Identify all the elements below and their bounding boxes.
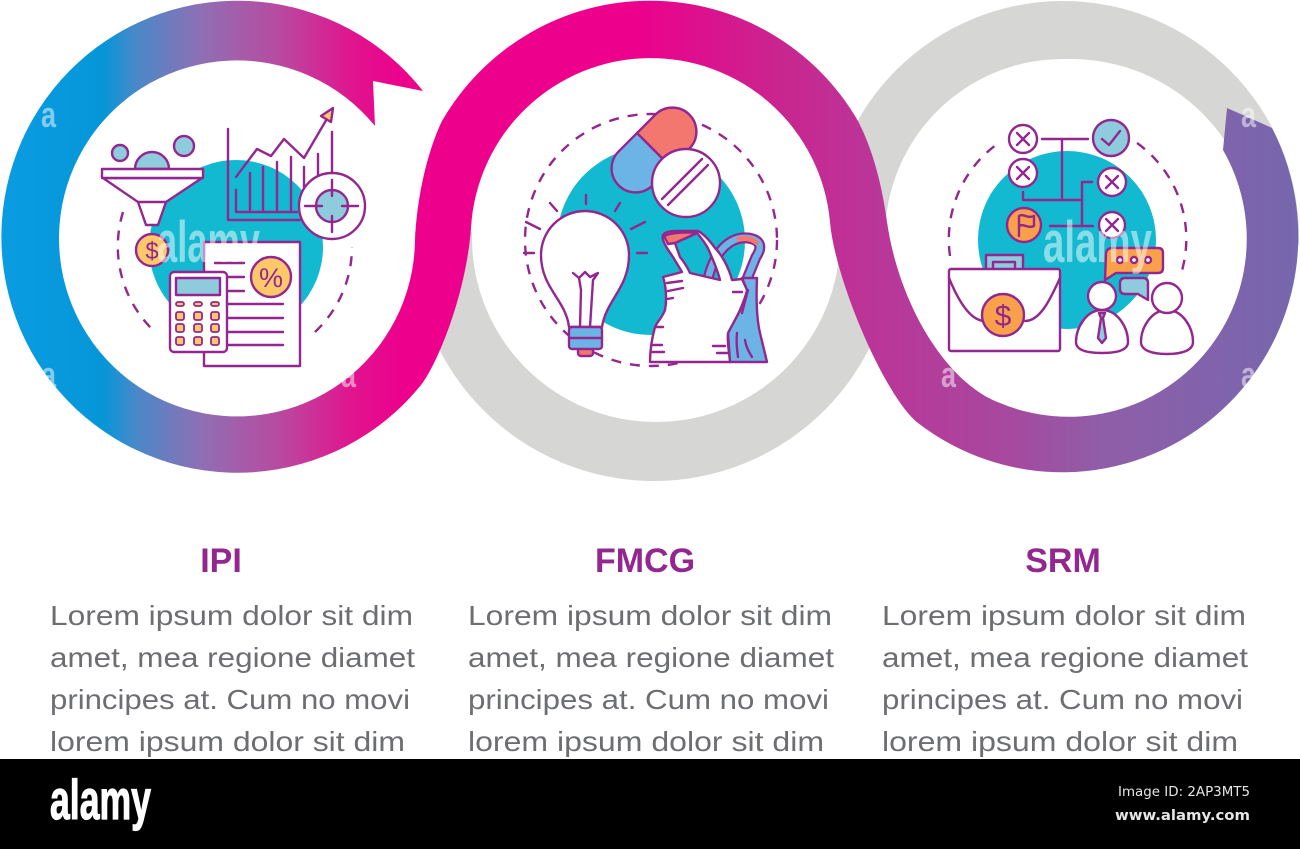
text block: IPI: amet, mea regione diamet bbox=[50, 642, 415, 673]
text block: FMCG: lorem ipsum dolor sit dim bbox=[468, 726, 824, 757]
teal circle bbox=[557, 147, 745, 335]
text block: IPI: principes at. Cum no movi bbox=[50, 684, 410, 715]
text block: SRM: principes at. Cum no movi bbox=[882, 684, 1243, 715]
text block: FMCG: Lorem ipsum dolor sit dim bbox=[468, 600, 832, 631]
text block: IPI: Lorem ipsum dolor sit dim bbox=[50, 600, 413, 631]
percent badge bbox=[251, 257, 291, 297]
teal circle bbox=[149, 160, 323, 334]
grey background rings bbox=[413, 0, 1299, 481]
alamy logo: alamy bbox=[50, 768, 151, 831]
shopping bag bbox=[650, 231, 767, 362]
text block: IPI: lorem ipsum dolor sit dim bbox=[50, 726, 405, 757]
watermark: alamy bbox=[1043, 210, 1152, 275]
blue side panel bbox=[728, 278, 767, 362]
briefcase bbox=[949, 255, 1060, 351]
businessman bbox=[1076, 282, 1128, 353]
dashed arc bbox=[118, 212, 352, 332]
heading: IPI: IPI bbox=[200, 542, 242, 580]
text block: SRM: amet, mea regione diamet bbox=[882, 642, 1248, 673]
text block: FMCG: principes at. Cum no movi bbox=[468, 684, 829, 715]
calculator bbox=[170, 272, 227, 352]
watermark: a bbox=[41, 354, 57, 395]
colleague bbox=[1141, 283, 1193, 354]
bag creases bbox=[652, 281, 752, 357]
coral strap lining bbox=[664, 232, 697, 244]
target bbox=[299, 173, 365, 239]
website: www.alamy.com bbox=[1115, 808, 1250, 824]
teal circle bbox=[978, 151, 1156, 329]
decision tree bbox=[1007, 120, 1129, 242]
dashed circle bbox=[525, 114, 777, 366]
watermark: a bbox=[941, 354, 957, 395]
inner white discs bbox=[59, 54, 1257, 431]
growth chart bbox=[228, 108, 333, 220]
back handle bbox=[708, 238, 760, 279]
capsule pill bbox=[602, 98, 706, 202]
text block: SRM bbox=[882, 600, 1248, 757]
funnel bbox=[102, 136, 203, 225]
icon: IPI bbox=[102, 108, 365, 366]
percent badge: % bbox=[259, 263, 283, 293]
coin bbox=[136, 234, 168, 266]
footer bar bbox=[0, 759, 1300, 849]
heading: FMCG: FMCG bbox=[595, 542, 695, 580]
briefcase: $ bbox=[995, 300, 1012, 333]
heading: SRM: SRM bbox=[1025, 542, 1101, 580]
gradient ribbon arrow bbox=[1, 1, 1298, 473]
icon: FMCG bbox=[524, 98, 777, 366]
watermark: a bbox=[1241, 94, 1257, 135]
text block: SRM: lorem ipsum dolor sit dim bbox=[882, 726, 1238, 757]
text block: FMCG bbox=[468, 600, 834, 757]
dashed arc bbox=[949, 142, 1186, 277]
document bbox=[204, 242, 300, 366]
text block: FMCG: amet, mea regione diamet bbox=[468, 642, 834, 673]
watermark: alamy bbox=[157, 210, 260, 275]
image id: Image ID: 2AP3MT5 bbox=[1118, 785, 1250, 800]
icon: SRM bbox=[949, 120, 1193, 354]
watermark bbox=[41, 94, 1257, 395]
text block: IPI bbox=[50, 600, 415, 757]
speech bubbles bbox=[1105, 248, 1163, 300]
light bulb bbox=[524, 195, 647, 356]
round tablet bbox=[652, 149, 720, 217]
watermark: a bbox=[341, 354, 357, 395]
white bag body bbox=[650, 231, 747, 362]
text block: SRM: Lorem ipsum dolor sit dim bbox=[882, 600, 1246, 631]
watermark: a bbox=[1241, 354, 1257, 395]
watermark: a bbox=[41, 94, 57, 135]
coin: $ bbox=[145, 238, 159, 265]
